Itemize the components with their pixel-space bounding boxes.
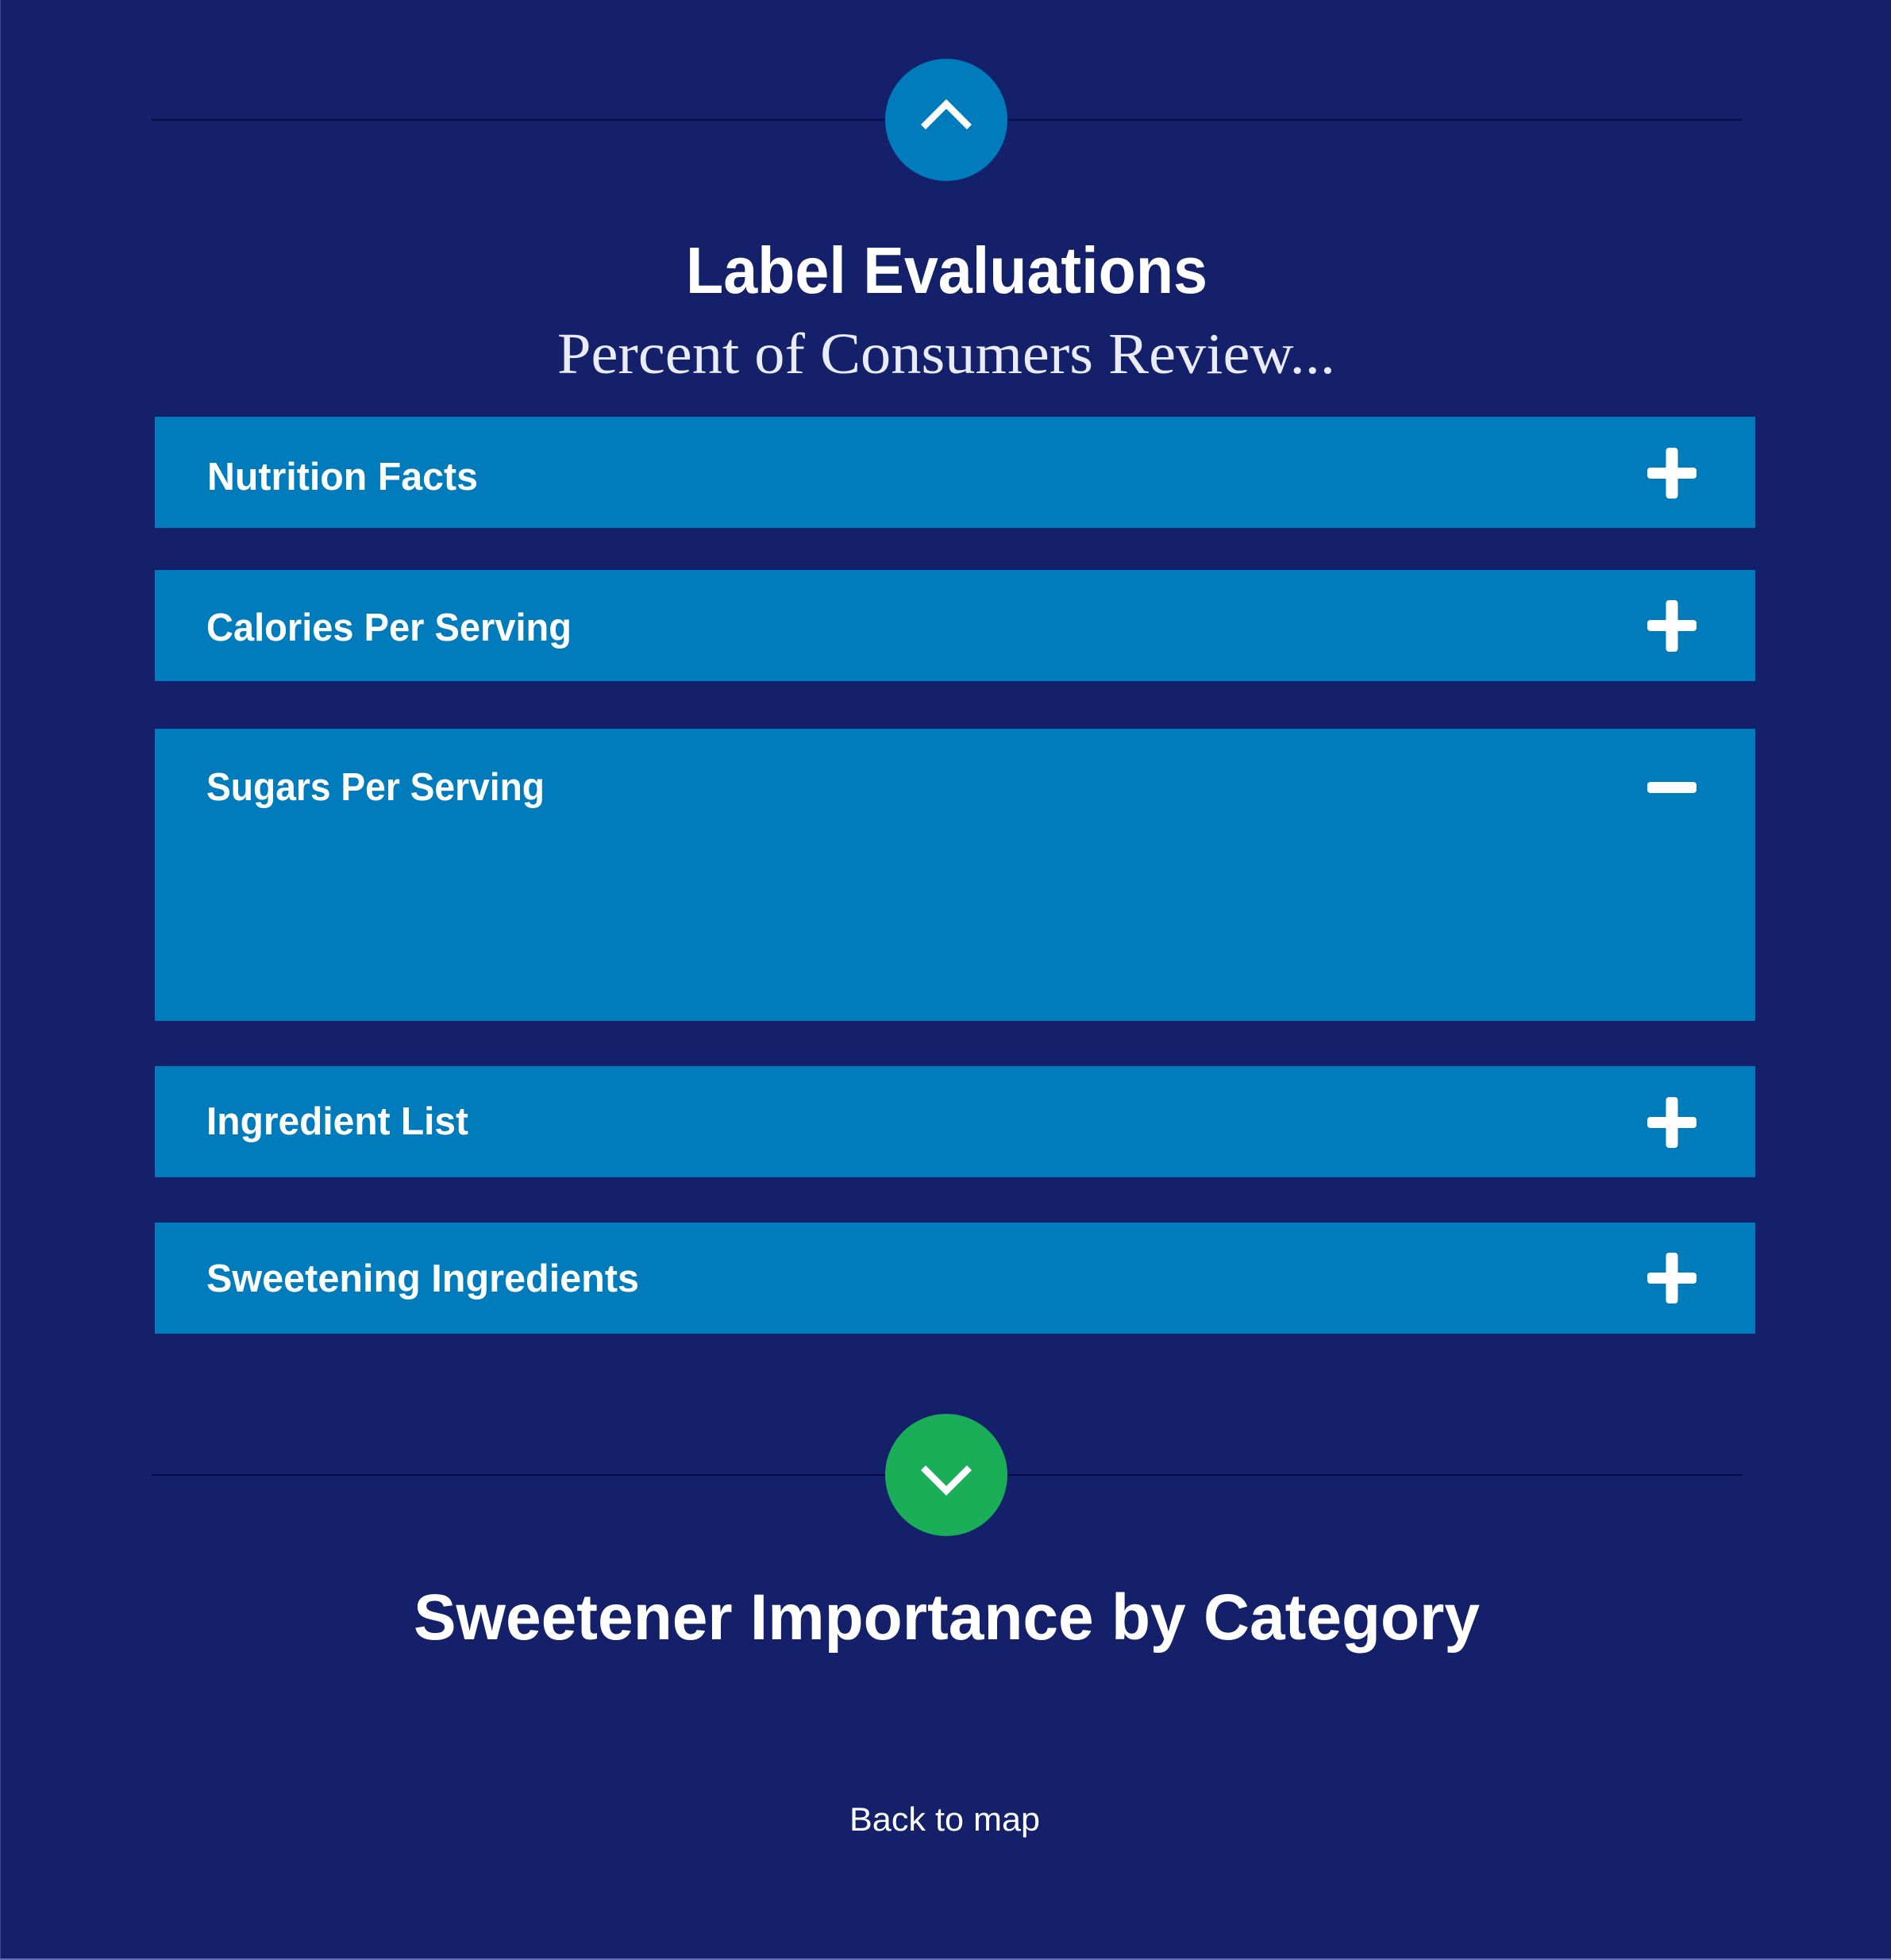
icon: plus <box>1647 1253 1697 1303</box>
icon: plus <box>1647 448 1697 499</box>
icon: plus <box>1647 600 1697 652</box>
divider with down arrow button <box>152 1414 1743 1536</box>
icon: minus <box>1647 782 1697 793</box>
panel: Sweetening Ingredients <box>155 1223 1755 1334</box>
icon: up chevron circle <box>885 59 1007 181</box>
panel: Calories Per Serving <box>155 570 1755 681</box>
title: Label Evaluations: Label Evaluations <box>686 233 1207 307</box>
label: Nutrition Facts: Nutrition Facts <box>207 456 478 499</box>
subtitle: Percent of Consumers Review: Percent of Consumers Review... <box>557 322 1335 386</box>
panel: Sugars Per Serving (expanded) <box>155 729 1755 1021</box>
label: Sweetening Ingredients: Sweetening Ingredients <box>206 1257 639 1300</box>
icon: down chevron circle <box>885 1414 1007 1536</box>
link: Back to map: Back to map <box>849 1800 1040 1838</box>
panel: Nutrition Facts <box>155 417 1755 528</box>
label: Sugars Per Serving: Sugars Per Serving <box>206 766 545 809</box>
label: Ingredient List: Ingredient List <box>206 1100 468 1143</box>
divider with up arrow button <box>152 59 1743 181</box>
icon: plus <box>1647 1097 1697 1148</box>
heading: Sweetener Importance by Category: Sweetener Importance by Category <box>414 1581 1480 1654</box>
panel: Ingredient List <box>155 1066 1755 1177</box>
label: Calories Per Serving: Calories Per Serving <box>206 606 572 649</box>
